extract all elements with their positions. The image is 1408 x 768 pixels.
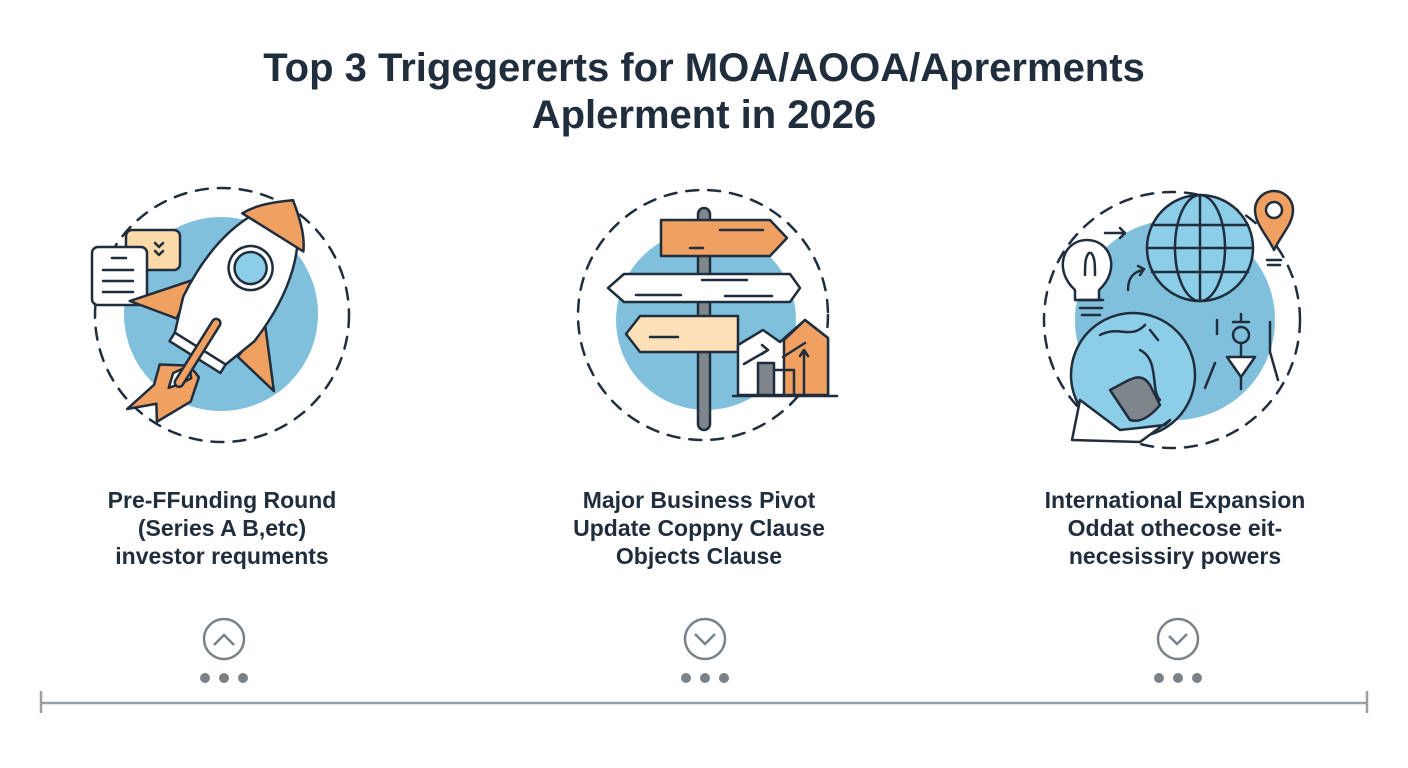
caption: funding round: Pre-FFunding Round (108, 487, 336, 513)
caption: business pivot: Objects Clause (616, 543, 782, 569)
caption: international expansion: Oddat othecose eit- (1068, 515, 1282, 541)
caption: international expansion (1045, 487, 1305, 569)
chat bubbles (126, 230, 180, 270)
dots (200, 673, 1202, 683)
timeline (41, 691, 1367, 713)
caption: business pivot (573, 487, 825, 569)
caption: funding round: investor requments (115, 543, 329, 569)
rocket (80, 155, 365, 470)
caption: international expansion: International Expansion (1045, 487, 1305, 513)
panel: signpost icon (578, 190, 837, 440)
button: down chevron 2 (685, 619, 725, 659)
caption: business pivot: Update Coppny Clause (573, 515, 825, 541)
caption: international expansion: necesissiry powers (1069, 543, 1281, 569)
caption: funding round: (Series A B,etc) (138, 515, 306, 541)
panel: rocket icon (80, 155, 365, 470)
panel: globe icon (1044, 191, 1300, 448)
button: up chevron (204, 619, 244, 659)
caption: funding round (108, 487, 336, 569)
title: Top 3 Trigegererts for MOA/AOOA/Aprerments (263, 46, 1145, 90)
caption: business pivot: Major Business Pivot (583, 487, 815, 513)
button: check 3 (1158, 619, 1198, 659)
title (263, 46, 1145, 137)
title: Aplerment in 2026 (532, 93, 876, 137)
